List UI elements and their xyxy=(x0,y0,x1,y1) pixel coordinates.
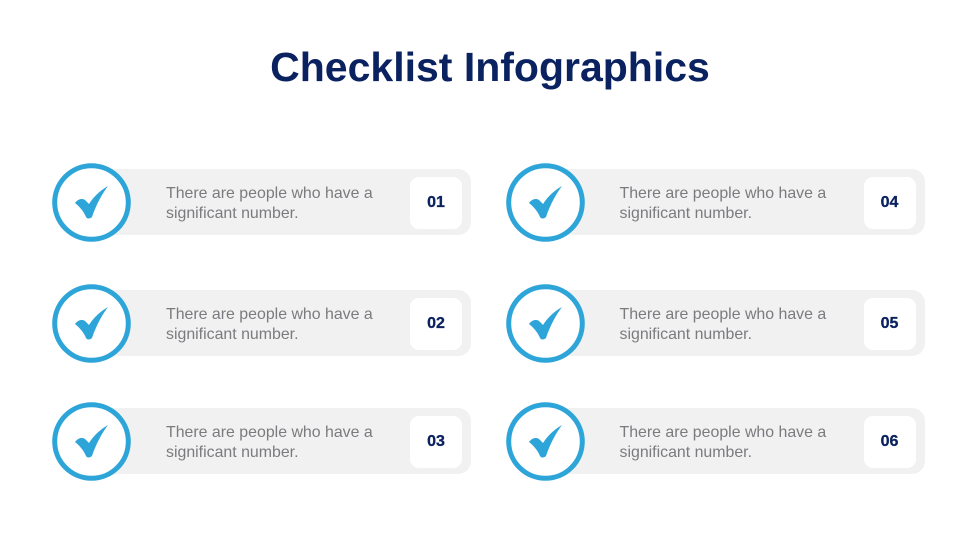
number badge xyxy=(410,298,462,350)
row background xyxy=(556,290,924,356)
text block: significant number. xyxy=(620,326,752,343)
title: Checklist Infographics xyxy=(270,44,710,90)
row background xyxy=(102,290,471,356)
panel: item 02 xyxy=(52,284,471,363)
icon: check circle xyxy=(506,402,585,481)
number badge: 05 xyxy=(881,315,898,332)
text block: There are people who have a xyxy=(620,424,826,441)
panel: item 01 xyxy=(52,163,471,242)
number badge xyxy=(864,298,916,350)
icon: check circle xyxy=(506,284,585,363)
number badge xyxy=(410,416,462,468)
text block: There are people who have a xyxy=(166,185,373,202)
text block xyxy=(166,306,373,343)
number badge xyxy=(864,416,916,468)
text block xyxy=(620,424,826,461)
text block: significant number. xyxy=(620,444,752,461)
icon: check circle xyxy=(506,163,585,242)
icon: check circle xyxy=(52,284,131,363)
panel: item 03 xyxy=(52,402,471,481)
number badge: 06 xyxy=(881,433,898,450)
text block xyxy=(620,306,826,343)
row background xyxy=(556,169,924,235)
panel: item 05 xyxy=(506,284,925,363)
text block: significant number. xyxy=(166,326,298,343)
text block xyxy=(620,185,826,222)
text block: significant number. xyxy=(620,205,752,222)
text block xyxy=(166,424,373,461)
number badge xyxy=(864,177,916,229)
text block: significant number. xyxy=(166,205,298,222)
number badge: 03 xyxy=(427,433,445,450)
number badge: 04 xyxy=(881,194,898,211)
icon: check circle xyxy=(52,402,131,481)
number badge: 02 xyxy=(427,315,445,332)
row background xyxy=(102,169,471,235)
text block: significant number. xyxy=(166,444,298,461)
text block xyxy=(166,185,373,222)
number badge: 01 xyxy=(427,194,445,211)
panel: item 06 xyxy=(506,402,925,481)
text block: There are people who have a xyxy=(620,185,826,202)
row background xyxy=(556,408,924,474)
panel: item 04 xyxy=(506,163,925,242)
text block: There are people who have a xyxy=(620,306,826,323)
text block: There are people who have a xyxy=(166,424,373,441)
row background xyxy=(102,408,471,474)
icon: check circle xyxy=(52,163,131,242)
number badge xyxy=(410,177,462,229)
text block: There are people who have a xyxy=(166,306,373,323)
